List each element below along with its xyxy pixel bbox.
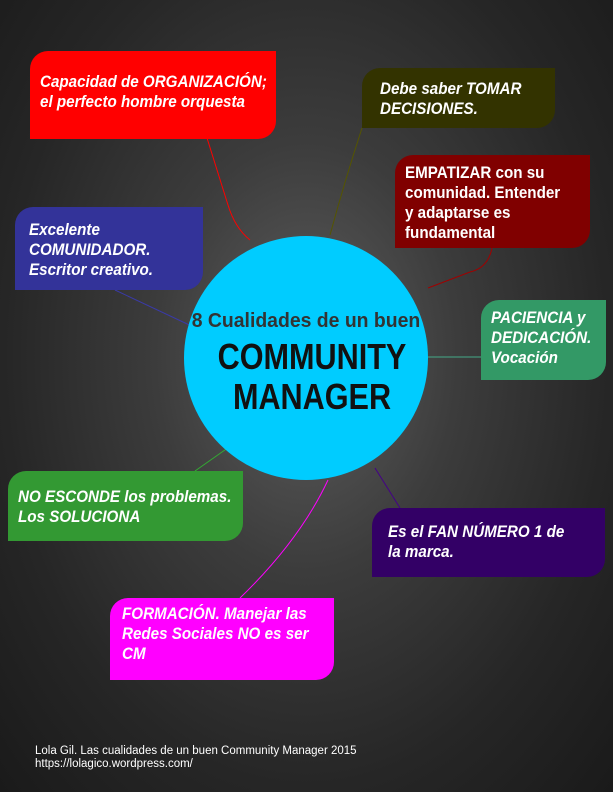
box: paciencia	[481, 300, 606, 380]
box: fan: la marca.	[388, 543, 454, 561]
box: formación: FORMACIÓN. Manejar las	[122, 605, 307, 623]
box: paciencia: Vocación	[491, 349, 558, 367]
box: empatizar	[395, 155, 590, 248]
box: soluciona	[8, 471, 243, 541]
box: fan: Es el FAN NÚMERO 1 de	[388, 523, 564, 541]
box: soluciona: NO ESCONDE los problemas.	[18, 488, 231, 506]
box: organización: el perfecto hombre orquesta	[40, 93, 245, 111]
box: empatizar: EMPATIZAR con su	[405, 164, 544, 182]
circle subtitle: 8 Cualidades de un buen	[192, 310, 420, 332]
box: paciencia: DEDICACIÓN.	[491, 329, 591, 347]
box: comunicador: Excelente	[29, 221, 100, 239]
box: soluciona: Los SOLUCIONA	[18, 508, 140, 526]
box: empatizar: y adaptarse es	[405, 204, 510, 222]
footer credit: Lola Gil. Las cualidades de un buen Community Manager 2015	[35, 745, 357, 757]
box: decisiones: Debe saber TOMAR	[380, 80, 521, 98]
box: empatizar: fundamental	[405, 224, 495, 242]
box: comunicador	[15, 207, 203, 290]
box: paciencia: PACIENCIA y	[491, 309, 585, 327]
box: formación	[110, 598, 334, 680]
circle title: COMMUNITY	[218, 336, 406, 377]
box: decisiones: DECISIONES.	[380, 100, 478, 118]
circle title	[218, 336, 406, 417]
box: fan	[372, 508, 605, 577]
box: comunicador: Escritor creativo.	[29, 261, 153, 279]
central circle	[184, 236, 428, 480]
box: decisiones	[362, 68, 555, 128]
box: empatizar: comunidad. Entender	[405, 184, 560, 202]
box: comunicador: COMUNIDADOR.	[29, 241, 150, 259]
box: formación: Redes Sociales NO es ser	[122, 625, 308, 643]
box: organización	[30, 51, 276, 139]
box: organización: Capacidad de ORGANIZACIÓN;	[40, 73, 267, 91]
circle title: MANAGER	[233, 376, 391, 417]
footer credit	[35, 745, 357, 770]
box: formación: CM	[122, 645, 146, 663]
footer credit: https://lolagico.wordpress.com/	[35, 758, 193, 770]
